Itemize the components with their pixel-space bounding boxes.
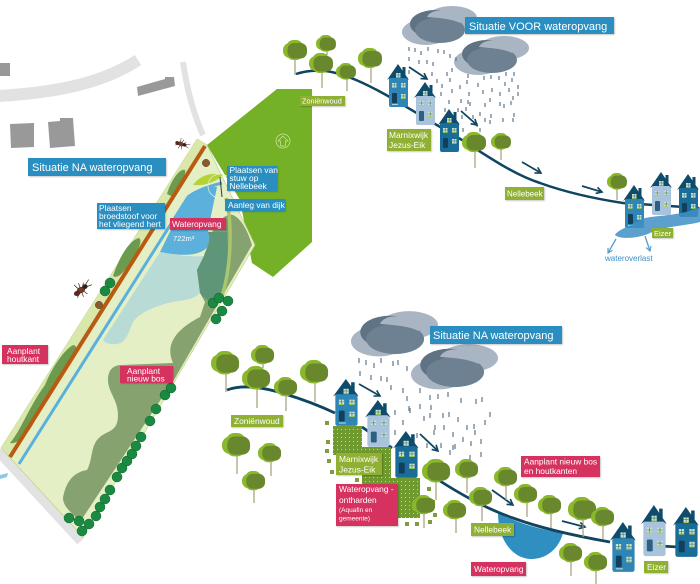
- label: Plaatsen broedstoof: het vliegend hert: [99, 219, 162, 229]
- label: Wateropvang after: Wateropvang: [474, 564, 524, 574]
- rain after: [359, 358, 490, 460]
- stream: Nellebeek after: [227, 387, 697, 548]
- rain before: [409, 47, 518, 132]
- trees after: [226, 362, 603, 584]
- panel: site map: [0, 60, 312, 541]
- map: park area: [1, 139, 255, 537]
- map: dike: [222, 198, 230, 296]
- cloud: right: [454, 36, 529, 75]
- label: Plaatsen broedstoof: broedstoof voor: [99, 211, 157, 221]
- label: Aanplant nieuw bos on map: [120, 366, 173, 384]
- flood water: [615, 207, 700, 238]
- label: Zoniënwoud before: Zoniënwoud: [302, 96, 342, 106]
- label: Wateropvang on map: Wateropvang: [172, 219, 222, 229]
- map: breeding stumps: [95, 159, 210, 309]
- small green patches: [325, 421, 437, 526]
- label: Plaatsen van stuw op Nellebeek: [227, 165, 278, 191]
- label: Aanplant houtkant: Aanplant: [7, 346, 41, 356]
- label: Eizer after: Eizer: [647, 562, 666, 572]
- map: small stream stub: [0, 473, 8, 479]
- map: weir: [208, 174, 232, 198]
- map: row of trees: [64, 278, 233, 536]
- arrows after: [359, 384, 585, 527]
- label: Aanplant nieuw bos on map: Aanplant: [127, 366, 161, 376]
- houses after: [333, 379, 699, 572]
- heading: Situatie NA wateropvang on map: [28, 158, 166, 176]
- panel: situatie na wateropvang: [211, 311, 699, 584]
- label: Aanplant nieuw bos on map: nieuw bos: [127, 374, 165, 384]
- label: Wateropvang ontharden: Wateropvang -: [339, 484, 394, 494]
- icon: north arrow: [276, 134, 290, 148]
- label: Aanplant houtkant: [2, 345, 48, 364]
- label: Eizer before: Eizer: [654, 229, 672, 238]
- heading: Situatie NA wateropvang: [430, 326, 562, 344]
- map: hedge strips: [10, 170, 185, 443]
- label: Marnixwijk Jezus-Eik after: Jezus-Eik: [339, 464, 376, 474]
- heading: Situatie VOOR wateropvang: Situatie VOOR wateropvang: [469, 21, 607, 33]
- map: wood over water: [197, 232, 229, 301]
- label: Plaatsen broedstoof: Plaatsen: [99, 203, 132, 213]
- cloud: left after: [351, 311, 438, 356]
- map: water basin: [160, 187, 217, 255]
- label: Nellebeek before: Nellebeek: [507, 190, 544, 198]
- map: pale wet meadow: [103, 252, 204, 344]
- label: Wateropvang ontharden: gemeente): [339, 516, 370, 522]
- label: Aanplant nieuw bos en houtkanten: [521, 456, 600, 477]
- label: Marnixwijk Jezus-Eik before: Marnixwijk: [389, 130, 429, 140]
- label: Plaatsen broedstoof: [97, 203, 165, 229]
- label: Wateropvang ontharden: (Aquafin en: [339, 507, 373, 514]
- heading: Situatie VOOR wateropvang: [465, 17, 614, 34]
- map: bank: [193, 174, 223, 185]
- label: Aanplant nieuw bos en houtkanten: Aanplant nieuw bos: [524, 456, 597, 466]
- houses before: [387, 64, 699, 228]
- label: Wateropvang after: [471, 562, 526, 576]
- heading: Situatie NA wateropvang on map: Situatie NA wateropvang: [32, 162, 152, 174]
- map: blue ditch: [19, 183, 222, 464]
- map: brown path: [10, 146, 205, 457]
- pond: wateropvang: [498, 513, 563, 559]
- map: surrounding roads: [0, 60, 203, 541]
- label: Marnixwijk Jezus-Eik before: Jezus-Eik: [389, 140, 426, 150]
- map: buildings: [0, 63, 175, 148]
- panel: situatie voor wateropvang: [283, 6, 700, 263]
- icon: stag beetle top: [174, 137, 191, 153]
- label: Wateropvang ontharden: [336, 484, 398, 526]
- cloud: left: [402, 6, 477, 45]
- stream: Nellebeek before: [296, 71, 699, 208]
- label: Nellebeek before: [505, 187, 544, 200]
- arrows before: [409, 67, 602, 192]
- arrows: water overflow: [608, 236, 650, 253]
- label: Plaatsen van stuw op Nellebeek: Nellebeek: [230, 181, 268, 191]
- label: Plaatsen van stuw op Nellebeek: stuw op: [230, 173, 259, 183]
- label: wateroverlast: wateroverlast: [604, 254, 653, 263]
- label: area: 722m³: [173, 234, 195, 243]
- unsealed green areas: [333, 426, 420, 518]
- icon: stag beetle bottom: [71, 279, 95, 299]
- label: Marnixwijk Jezus-Eik before: [387, 129, 431, 151]
- trees before: [295, 48, 617, 200]
- label: Nellebeek after: [471, 523, 514, 536]
- map: wood: [63, 215, 252, 522]
- label: Marnixwijk Jezus-Eik after: Marnixwijk: [339, 454, 379, 464]
- map: strip beside path: [1, 139, 205, 457]
- label: Aanleg van dijk: Aanleg van dijk: [228, 200, 286, 210]
- label: Eizer after: [644, 561, 668, 573]
- label: Plaatsen van stuw op Nellebeek: Plaatsen van: [230, 165, 278, 175]
- map: forest area Zoniënwoud: [207, 89, 312, 277]
- label: Aanplant houtkant: houtkant: [7, 354, 40, 364]
- label: Wateropvang ontharden: ontharden: [339, 495, 377, 505]
- label: Zoniënwoud after: Zoniënwoud: [234, 416, 280, 426]
- label: Marnixwijk Jezus-Eik after: [336, 453, 382, 475]
- heading: Situatie NA wateropvang: Situatie NA wateropvang: [433, 330, 553, 342]
- label: Nellebeek after: Nellebeek: [474, 524, 512, 534]
- label: Aanplant nieuw bos en houtkanten: en houtkanten: [524, 466, 577, 476]
- cloud: right after: [411, 344, 498, 389]
